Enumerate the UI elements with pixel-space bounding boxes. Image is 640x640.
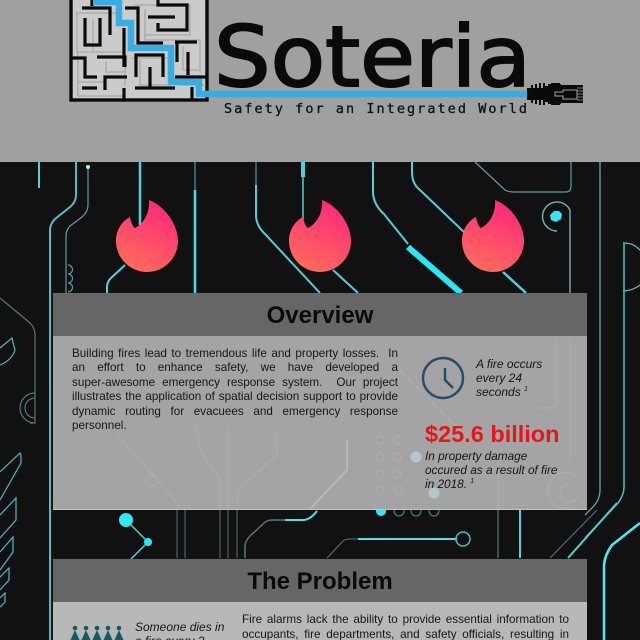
problem heading (53, 559, 587, 602)
node chain (126, 520, 148, 559)
header band (0, 0, 640, 162)
stat: fire frequency: A fire occurs (476, 357, 542, 371)
maze (71, 0, 527, 100)
stat: fire frequency: every 24 (476, 371, 522, 385)
icon: five people (70, 626, 124, 640)
logo (69, 0, 583, 117)
overview text: super-awesome emergency response system. Our project (72, 376, 398, 389)
problem text: Fire alarms lack the ability to provide essential information to (242, 613, 569, 626)
icon: flame 2 (289, 200, 351, 272)
overview text: dynamic routing for evacuees and emergency response (72, 405, 398, 418)
icon: network connector (527, 83, 583, 105)
tagline: Safety for an Integrated World (224, 101, 527, 117)
stat: fire frequency (476, 357, 542, 399)
stat: damage figure: $25.6 billion (425, 421, 560, 447)
stat: damage caption: occured as a result of fire (425, 463, 557, 477)
stat: damage caption: in 2018. 1 (425, 477, 474, 491)
trace details (0, 162, 640, 538)
blue route (93, 2, 527, 94)
overview text (72, 347, 398, 432)
stat: damage caption (425, 449, 557, 491)
stat: death frequency: Someone dies in (135, 620, 224, 634)
left chevrons (0, 338, 21, 607)
icon: clock (422, 356, 464, 400)
problem heading: The Problem (247, 568, 393, 595)
stat: fire frequency: seconds 1 (476, 385, 528, 399)
overview body panel (53, 336, 587, 510)
problem body panel (53, 601, 587, 640)
overview text: personnel. (72, 419, 127, 432)
wordmark: Soteria (214, 8, 531, 106)
stat: damage caption: In property damage (425, 449, 527, 463)
overview heading: Overview (267, 302, 373, 329)
overview heading (53, 293, 587, 336)
overview text: illustrates the application of spatial decision support to provide (72, 390, 398, 403)
overview text: an effort to enhance safety, we have developed a (72, 361, 398, 374)
icon: flame 1 (116, 200, 178, 272)
overview text: Building fires lead to tremendous life and property losses. In (72, 347, 398, 360)
icon: flame 3 (462, 200, 524, 272)
problem text (242, 613, 569, 640)
